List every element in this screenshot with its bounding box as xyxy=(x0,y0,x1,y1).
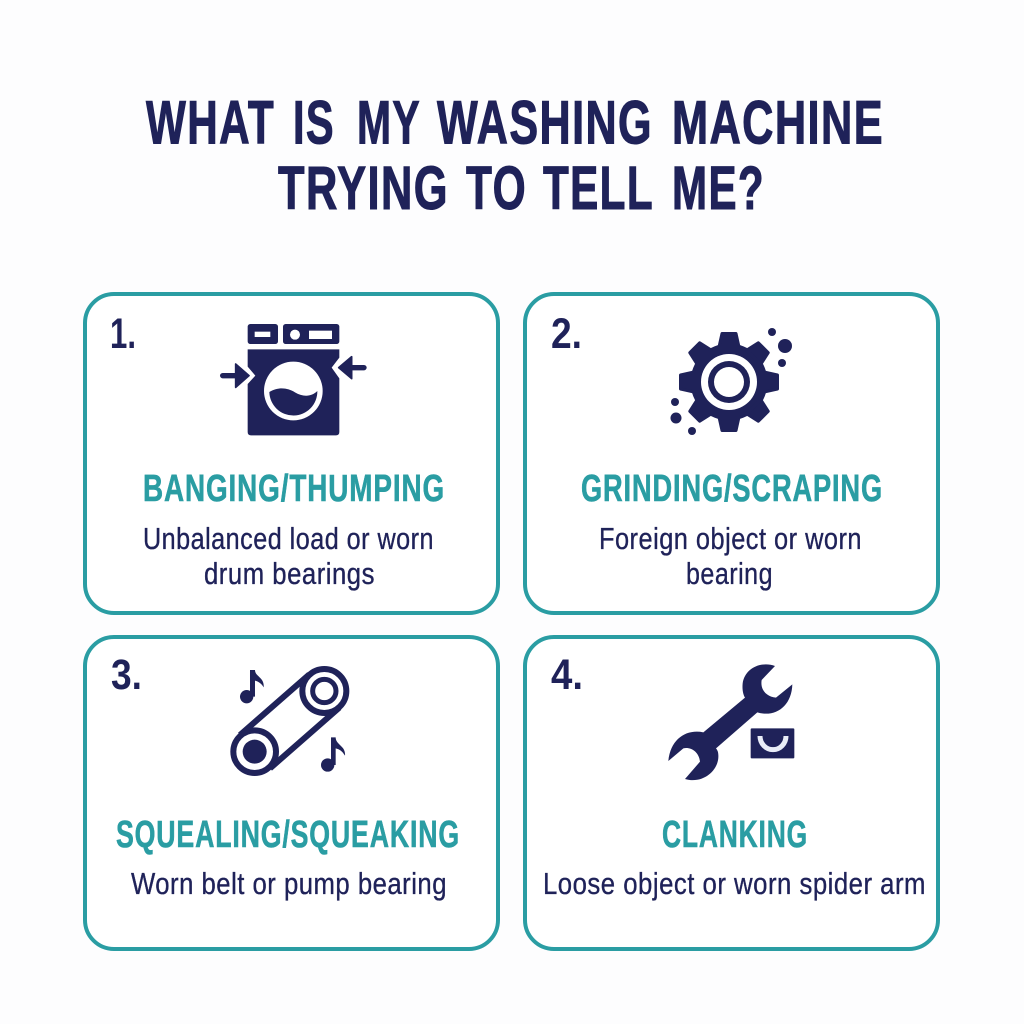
title: MY xyxy=(357,88,421,156)
number 4: 4. xyxy=(551,651,583,699)
title: MACHINE xyxy=(672,88,884,156)
number 1: 1. xyxy=(110,310,136,358)
icon: belt and pulleys with music notes xyxy=(233,669,346,773)
heading: BANGING/THUMPING xyxy=(143,468,445,510)
title: TRYING xyxy=(278,154,449,222)
heading: CLANKING xyxy=(662,814,808,856)
icon: wrench and bracket xyxy=(668,664,794,780)
icon: washing machine with arrows xyxy=(223,324,364,435)
title: ME? xyxy=(672,154,765,222)
heading: GRINDING/SCRAPING xyxy=(581,468,883,510)
description xyxy=(143,521,434,591)
icon: gear with debris xyxy=(670,328,792,435)
description: Foreign object or worn xyxy=(599,521,862,556)
title: WHAT xyxy=(146,88,275,156)
title: TELL xyxy=(543,154,654,222)
heading: SQUEALING/SQUEAKING xyxy=(116,814,460,856)
title: TO xyxy=(466,154,527,222)
panel: clanking xyxy=(525,637,938,949)
panel: squealing/squeaking xyxy=(85,637,498,949)
title: WASHING xyxy=(437,88,653,156)
description: bearing xyxy=(686,556,773,591)
description: Unbalanced load or worn xyxy=(143,521,434,556)
description: Loose object or worn spider arm xyxy=(543,866,926,901)
title: IS xyxy=(293,88,335,156)
title xyxy=(146,88,884,222)
description: Worn belt or pump bearing xyxy=(131,866,447,901)
number 2: 2. xyxy=(551,310,582,358)
description: drum bearings xyxy=(204,556,375,591)
description xyxy=(599,521,862,591)
number 3: 3. xyxy=(111,651,142,699)
panel: grinding/scraping xyxy=(525,294,938,613)
panel: banging/thumping xyxy=(85,294,498,613)
